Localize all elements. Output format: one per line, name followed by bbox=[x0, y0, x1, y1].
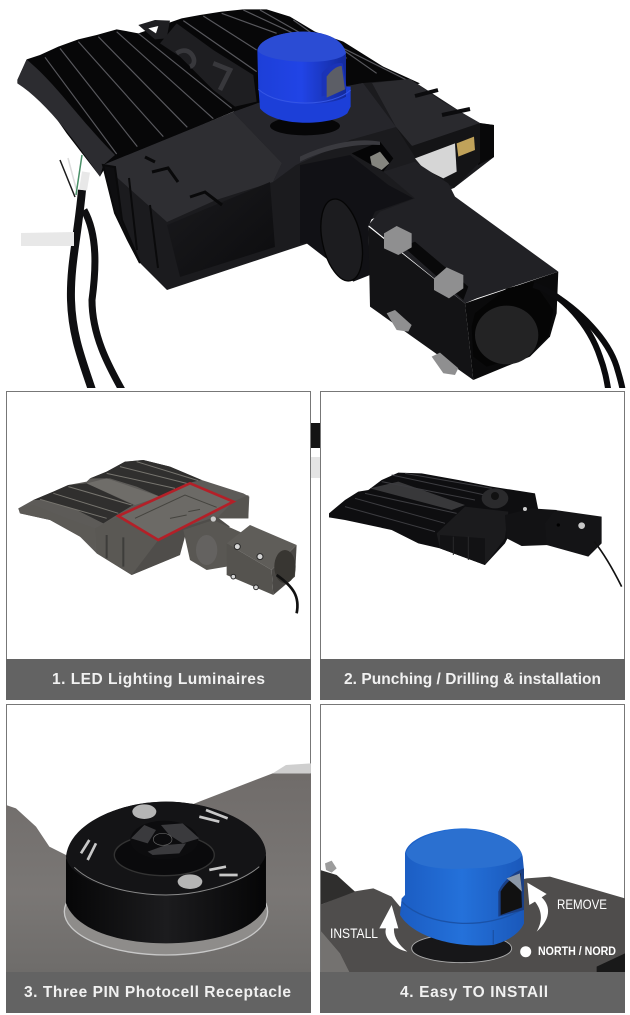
caption: 3. Three PIN Photocell Receptacle bbox=[24, 984, 291, 1001]
right shadow bbox=[597, 953, 625, 973]
slot bbox=[352, 142, 393, 172]
bracket top bbox=[368, 162, 558, 303]
lower right plate bbox=[396, 123, 480, 188]
warning tag bbox=[21, 232, 74, 246]
arm disc bbox=[320, 198, 363, 282]
black luminaire bbox=[329, 473, 622, 587]
bolt bbox=[325, 861, 337, 873]
photo scene bbox=[320, 828, 625, 973]
caption: 4. Easy TO INSTAll bbox=[400, 984, 548, 1001]
install label: INSTALL bbox=[330, 925, 378, 941]
caption bar bbox=[320, 972, 625, 1013]
caption bar bbox=[320, 659, 625, 700]
housing body bbox=[103, 79, 494, 290]
edge fragment: grey bbox=[311, 457, 320, 478]
center bolt bbox=[370, 152, 389, 170]
arm, bracket and hardware bbox=[300, 137, 558, 380]
panel: step 2 punching and drilling bbox=[320, 392, 625, 700]
dark side box bbox=[320, 870, 355, 905]
left cables bbox=[60, 155, 122, 390]
panel: step 1 LED lighting luminaires bbox=[6, 392, 311, 700]
caption: 2. Punching / Drilling & installation bbox=[344, 671, 601, 688]
panel: step 3 photocell receptacle bbox=[6, 704, 311, 1013]
arm bbox=[300, 155, 413, 282]
grey luminaire surface bbox=[320, 877, 625, 973]
north label: NORTH / NORD bbox=[538, 946, 616, 958]
end cap bbox=[478, 123, 494, 165]
bolts bbox=[384, 226, 463, 375]
opening bbox=[504, 285, 519, 290]
panel: hero luminaire photo bbox=[17, 9, 623, 390]
right plate bbox=[372, 79, 480, 146]
product label bbox=[415, 143, 457, 178]
heat sink fins bbox=[17, 9, 420, 177]
caption bar bbox=[6, 972, 311, 1013]
bumps bbox=[415, 90, 470, 115]
red highlight box bbox=[118, 483, 233, 540]
bracket end bbox=[465, 272, 558, 380]
north dot bbox=[520, 946, 531, 957]
edge fragment: cable bbox=[311, 423, 320, 448]
sensor window bbox=[498, 868, 524, 917]
light lower left bbox=[321, 932, 350, 972]
receptacle disc bbox=[64, 802, 268, 955]
install arrow bbox=[379, 905, 407, 952]
right cables bbox=[533, 285, 623, 390]
blue photocell cap bbox=[400, 828, 524, 946]
panel: step 4 easy to install bbox=[320, 704, 625, 1013]
housing top plane bbox=[103, 112, 282, 222]
bracket front bbox=[368, 227, 473, 380]
gold sticker bbox=[457, 137, 475, 157]
caption bar bbox=[6, 659, 311, 700]
left ribs bbox=[103, 165, 158, 268]
remove arrow bbox=[527, 883, 548, 932]
panel frame bbox=[6, 392, 310, 700]
caption: 1. LED Lighting Luminaires bbox=[52, 671, 265, 688]
remove label: REMOVE bbox=[557, 896, 607, 912]
panel frame bbox=[320, 392, 624, 700]
grey luminaire surface bbox=[6, 763, 311, 973]
panel frame bbox=[320, 704, 624, 1012]
strap bbox=[403, 242, 468, 300]
luminaire with red highlight bbox=[18, 460, 297, 613]
housing notches bbox=[145, 157, 222, 205]
photocell: blue bbox=[257, 32, 351, 135]
central strip bbox=[233, 83, 396, 182]
panel frame bbox=[6, 704, 310, 1012]
housing front face bbox=[167, 182, 275, 277]
wiring connector bbox=[138, 20, 257, 107]
socket ring bbox=[412, 934, 512, 963]
